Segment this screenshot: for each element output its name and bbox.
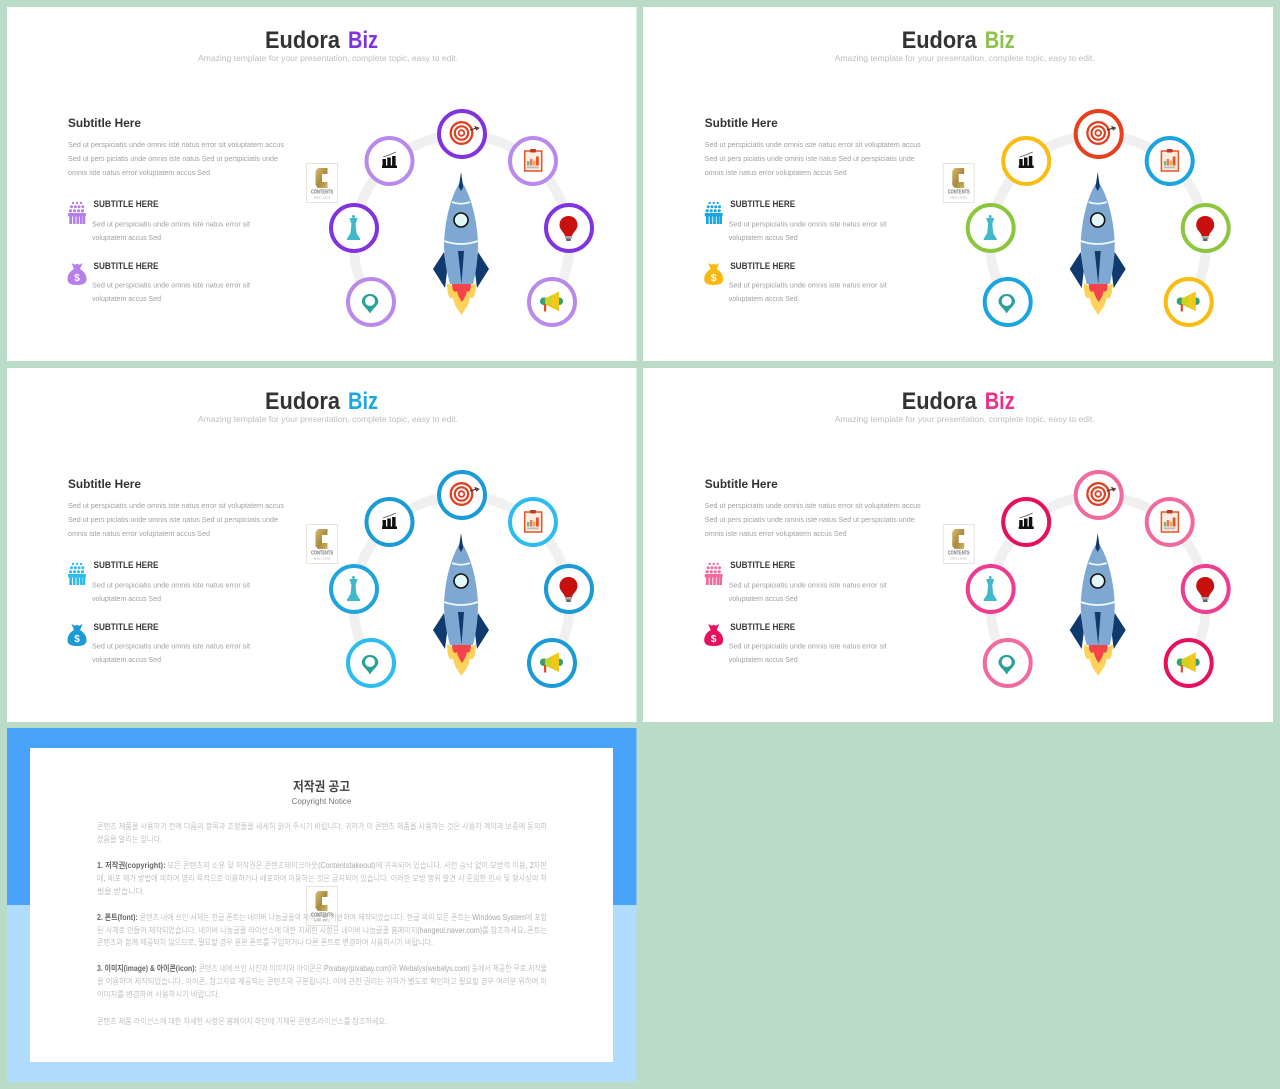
text block: first item xyxy=(92,199,251,242)
circle: chart xyxy=(366,499,412,545)
icon: money bag: $ xyxy=(74,634,80,645)
icon: money bag xyxy=(68,624,86,646)
circle: report xyxy=(510,138,556,184)
text block: second item: Sed ut perspiciatis unde omnis iste natus error sit xyxy=(729,280,888,290)
circle: megaphone xyxy=(529,279,575,325)
text block: first item: Sed ut perspiciatis unde omnis iste natus error sit xyxy=(92,580,251,590)
text block: introduction: 셨음을 알리는 입니다. xyxy=(97,835,162,844)
circle: chess xyxy=(968,205,1014,251)
title: Eudora xyxy=(265,27,341,54)
subheading: Copyright Notice xyxy=(292,796,352,806)
icon: money bag: $ xyxy=(711,273,717,284)
icon: rocket xyxy=(433,172,489,315)
text block: font xyxy=(97,912,548,947)
slide background xyxy=(7,368,636,722)
text block: second item: Sed ut perspiciatis unde omnis iste natus error sit xyxy=(729,642,888,650)
text block: closing: 콘텐츠 제품 라이선스에 대한 자세한 사항은 홈페이지 하단에 기재된 콘텐츠라이선스를 참조하세요. xyxy=(97,1016,387,1026)
panel: purple slide xyxy=(7,7,636,361)
text block: subtitle and intro: omnis iste natus error voluptatem accus Sed xyxy=(705,529,847,538)
text block: first item: SUBTITLE HERE xyxy=(730,199,795,210)
icon: basket xyxy=(68,202,86,224)
text block: second item xyxy=(92,622,251,664)
heading: 저작권 공고 xyxy=(293,779,350,794)
text block: second item: SUBTITLE HERE xyxy=(94,261,158,272)
text block: second item xyxy=(92,261,251,303)
icon: basket xyxy=(705,563,723,585)
circle: bulb xyxy=(546,205,592,251)
icon: rocket xyxy=(433,533,489,676)
title: Eudora xyxy=(902,388,977,415)
text block: first item: voluptatem accus Sed xyxy=(92,594,161,603)
circle: target xyxy=(1076,472,1122,518)
logo watermark xyxy=(943,164,974,202)
text block: subtitle and intro: Sed ut pers piciatis unde omnis iste natus Sed ut perspiciatis unde xyxy=(68,154,278,163)
text block: first item: voluptatem accus Sed xyxy=(729,233,798,242)
text block: first item xyxy=(729,199,888,242)
icon: money bag: $ xyxy=(74,273,80,284)
text block: subtitle and intro: Subtitle Here xyxy=(705,116,778,130)
panel: blue slide xyxy=(7,368,636,722)
text block: first item xyxy=(729,560,888,603)
circle: pin xyxy=(985,640,1031,686)
logo watermark xyxy=(306,164,338,202)
icon: money bag xyxy=(704,624,723,646)
icon: money bag: $ xyxy=(711,634,717,645)
text block: first item: SUBTITLE HERE xyxy=(94,560,158,571)
slide background xyxy=(7,7,636,361)
text block: copyright: 매, 배포 재가 방법에 의하여 영리 목적으로 이용하거나 배포하여 이용하는 것은 금지되어 있습니다. 이러한 모방 행위 발견 시 준엄한 민사 및 형사상의 처 xyxy=(97,873,547,883)
slide background xyxy=(643,368,1273,722)
text block: copyright xyxy=(97,860,548,896)
text block: second item: SUBTITLE HERE xyxy=(94,622,158,633)
text block: subtitle and intro xyxy=(68,116,284,177)
icon: money bag xyxy=(704,263,723,285)
text block: subtitle and intro: Sed ut pers piciatis unde omnis iste natus Sed ut perspiciatis unde xyxy=(705,515,915,524)
circle: megaphone xyxy=(529,640,575,686)
icon: basket xyxy=(68,563,86,585)
panel: green slide xyxy=(643,7,1273,361)
text block: image and icon: 이미지를 변경하여 사용하시기 바랍니다. xyxy=(97,989,220,999)
icon: basket xyxy=(705,202,723,224)
circle: target xyxy=(1076,111,1122,157)
icon: rocket xyxy=(1070,533,1126,676)
panel: copyright notice xyxy=(7,728,636,1082)
circle: bulb xyxy=(1183,205,1229,251)
text block: image and icon: 3. 이미지(image) & 아이콘(icon): 콘텐츠 내에 쓰인 사진과 이미지와 아이콘은 Pixabay(pixabay.com)와 Webalys(webalys.com) 등에서 제공한 무료 저작물 xyxy=(97,963,547,973)
text block: subtitle and intro: Sed ut pers piciatis unde omnis iste natus Sed ut perspiciatis unde xyxy=(705,154,915,163)
white card xyxy=(30,748,613,1062)
text block: subtitle and intro: Subtitle Here xyxy=(68,116,141,130)
text block: first item: voluptatem accus Sed xyxy=(92,233,161,242)
circle: chess xyxy=(968,566,1014,612)
text block: second item xyxy=(729,622,888,664)
arc track xyxy=(990,496,1206,663)
text block: image and icon: 을 이용하여 제작되었습니다. 아이콘, 참고자료 제공되는 콘텐츠와 구분됩니다. 이에 관한 권리는 귀하가 별도로 확인하고 필요할 경우 여러분 위하여 이 xyxy=(97,976,547,986)
text block: font: 된 서체로 만들어 제작되었습니다. 네이버 나눔글꼴 라이선스에 대한 자세한 사항은 네이버 나눔글꼴 홈페이지(hangeul.naver.com)를 참조하세요. 폰트는 xyxy=(97,925,547,935)
circle: pin xyxy=(348,640,394,686)
blue upper band xyxy=(7,728,636,905)
circle: chess xyxy=(331,566,377,612)
text block: subtitle and intro: Sed ut perspiciatis unde omnis iste natus error sit voluptatem accus xyxy=(68,140,284,149)
text block: introduction: 콘텐츠 제품을 사용하기 전에 다음의 항목과 조항들을 세세히 읽어 주시기 바랍니다. 귀하가 이 콘텐츠 제품을 사용하는 것은 사용자 계약과 보증에 동의하 xyxy=(97,821,548,831)
text block: subtitle and intro: omnis iste natus error voluptatem accus Sed xyxy=(705,168,847,177)
logo watermark xyxy=(943,524,974,564)
text block: first item: Sed ut perspiciatis unde omnis iste natus error sit xyxy=(729,220,888,228)
circle: report xyxy=(510,499,556,545)
text block: first item: SUBTITLE HERE xyxy=(94,199,158,210)
title: Eudora xyxy=(902,27,977,54)
text block: first item: Sed ut perspiciatis unde omnis iste natus error sit xyxy=(729,580,888,590)
title: Biz xyxy=(348,27,378,54)
text block: subtitle and intro: Sed ut perspiciatis unde omnis iste natus error sit voluptatem accus xyxy=(705,501,921,510)
circle: chart xyxy=(1003,499,1049,545)
text block: subtitle and intro: Sed ut pers piciatis unde omnis iste natus Sed ut perspiciatis unde xyxy=(68,515,278,524)
text block: subtitle and intro: Subtitle Here xyxy=(705,477,778,491)
text block: copyright: 벌을 받습니다. xyxy=(97,887,145,896)
arc track xyxy=(354,135,569,302)
text block: first item: Sed ut perspiciatis unde omnis iste natus error sit xyxy=(92,220,251,228)
text block: second item: Sed ut perspiciatis unde omnis iste natus error sit xyxy=(92,642,251,650)
text block: subtitle and intro: Subtitle Here xyxy=(68,477,141,491)
circle: target xyxy=(439,472,485,518)
text block: subtitle and intro: Sed ut perspiciatis unde omnis iste natus error sit voluptatem accus xyxy=(68,501,284,510)
tagline: Amazing template for your presentation, complete topic, easy to edit. xyxy=(835,414,1095,424)
text block: first item: voluptatem accus Sed xyxy=(729,594,798,603)
text block: first item: SUBTITLE HERE xyxy=(730,560,795,571)
circle: pin xyxy=(985,279,1031,325)
text block: second item: Sed ut perspiciatis unde omnis iste natus error sit xyxy=(92,280,251,290)
circle: chart xyxy=(1003,138,1049,184)
text block: subtitle and intro xyxy=(68,477,284,538)
circle: bulb xyxy=(1183,566,1229,612)
text block: second item: voluptatem accus Sed xyxy=(729,655,798,664)
text block: subtitle and intro xyxy=(705,477,921,538)
title: Biz xyxy=(985,27,1015,54)
logo watermark xyxy=(306,886,338,926)
circle: pin xyxy=(348,279,394,325)
slide background xyxy=(643,7,1273,361)
light blue lower band xyxy=(7,905,636,1082)
text block: second item: voluptatem accus Sed xyxy=(92,294,161,303)
text block: second item xyxy=(729,261,888,303)
text block: first item xyxy=(92,560,251,603)
arc track xyxy=(990,135,1206,302)
text block: second item: voluptatem accus Sed xyxy=(729,294,798,303)
text block: introduction xyxy=(97,821,548,844)
title: Eudora xyxy=(265,388,341,415)
text block: image and icon xyxy=(97,963,547,999)
text block: second item: voluptatem accus Sed xyxy=(92,655,161,664)
panel: pink slide xyxy=(643,368,1273,722)
circle: chart xyxy=(366,138,412,184)
circle: megaphone xyxy=(1166,640,1212,686)
circle: target xyxy=(439,111,485,157)
circle: bulb xyxy=(546,566,592,612)
circle: report xyxy=(1147,138,1193,184)
arc track xyxy=(354,496,569,663)
title: Biz xyxy=(985,388,1015,415)
text block: subtitle and intro: omnis iste natus error voluptatem accus Sed xyxy=(68,168,210,177)
icon: money bag xyxy=(68,263,86,285)
text block: second item: SUBTITLE HERE xyxy=(730,622,795,633)
text block: second item: SUBTITLE HERE xyxy=(730,261,795,272)
tagline: Amazing template for your presentation, complete topic, easy to edit. xyxy=(835,53,1095,63)
text block: font: 콘텐츠와 함께 제공되지 않으므로, 필요할 경우 원본 폰트를 구입하거나 다른 폰트로 변경하여 사용하시기 바랍니다. xyxy=(97,937,433,947)
circle: chess xyxy=(331,205,377,251)
text block: subtitle and intro xyxy=(705,116,921,177)
circle: report xyxy=(1147,499,1193,545)
text block: subtitle and intro: Sed ut perspiciatis unde omnis iste natus error sit voluptatem accus xyxy=(705,140,921,149)
text block: font: 2. 폰트(font): 콘텐츠 내에 쓰인 서체는 한글 폰트는 네이버 나눔글꼴의 저작물을 기반하여 제작되었습니다. 한글 외의 모든 폰트는 Windows System에 포함 xyxy=(97,912,548,922)
text block: subtitle and intro: omnis iste natus error voluptatem accus Sed xyxy=(68,529,210,538)
circle: megaphone xyxy=(1166,279,1212,325)
tagline: Amazing template for your presentation, complete topic, easy to edit. xyxy=(198,53,458,63)
tagline: Amazing template for your presentation, complete topic, easy to edit. xyxy=(198,414,458,424)
title: Biz xyxy=(348,388,378,415)
logo watermark xyxy=(306,524,338,564)
icon: rocket xyxy=(1070,172,1126,315)
text block: copyright: 1. 저작권(copyright): 모든 콘텐츠의 소유 및 저작권은 콘텐츠테이크아웃(Contentstakeout)에 귀속되어 있습니다. 사전 승낙 없이 모방적 이용, 2차판 xyxy=(97,860,548,870)
